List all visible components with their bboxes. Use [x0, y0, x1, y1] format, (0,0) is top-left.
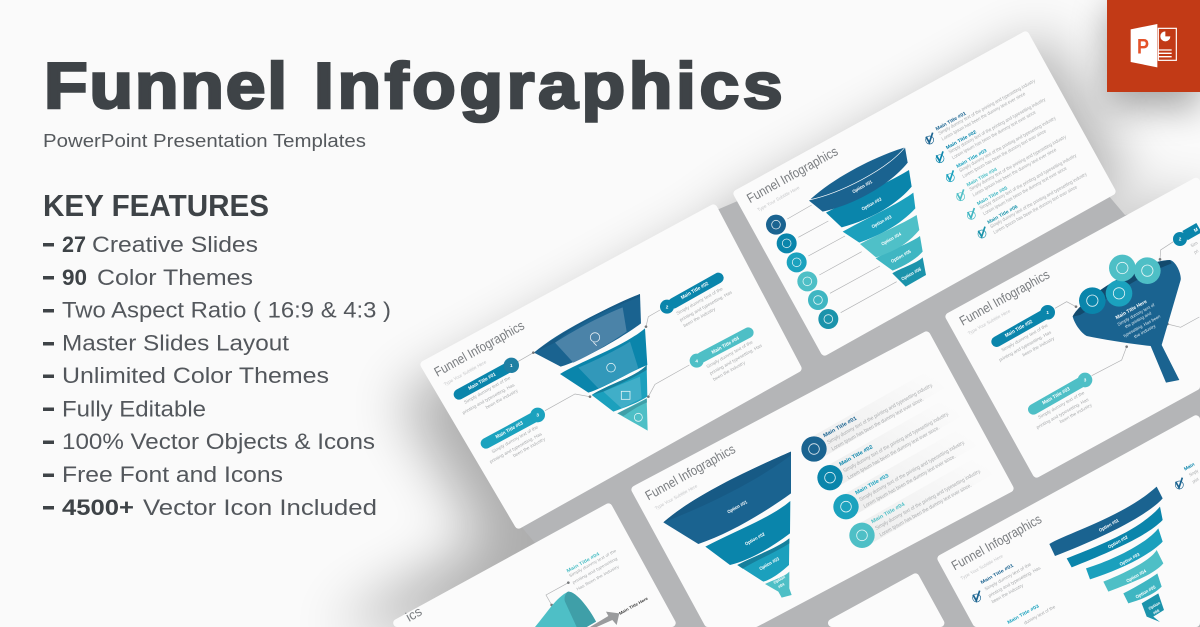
feature list: Creative Slides — [92, 232, 258, 257]
callout: main title 01: Main Title #01 — [467, 372, 497, 392]
four tier funnel — [534, 294, 648, 431]
twisted funnel: Option #04 — [1125, 568, 1147, 584]
list rows: Lorem Ipsum has been the dummy text ever since. — [847, 425, 941, 481]
callout: main title 02: 2 — [666, 304, 669, 309]
callout: main title 03: printing and typesetting. Has — [489, 431, 543, 464]
panel: slide with four tier funnel and icons, left — [424, 208, 798, 525]
checklist: Lorem Ipsum has been the dummy text ever since — [951, 110, 1037, 161]
checklist item 03 — [1006, 603, 1056, 626]
four tier funnel: Option — [772, 574, 787, 585]
checklist item 02 — [1175, 462, 1200, 489]
six tier funnel: Option #03 — [871, 214, 893, 229]
callout: main title 04: been the industry — [712, 360, 747, 382]
list rows — [801, 378, 986, 548]
feature list: Unlimited Color Themes — [62, 363, 329, 388]
callout: main title 01: printing and typesetting. Has — [461, 382, 516, 415]
checklist item 01: printing and typesetting. Has — [987, 565, 1042, 598]
slide title: ics — [403, 604, 425, 625]
checklist item 01: been the industry — [991, 582, 1025, 604]
twisted funnel: Option #03 — [1119, 552, 1141, 567]
slide subtitle: Type Your Subtitle Here — [443, 359, 488, 387]
callout: main title cut off at right edge — [1173, 227, 1199, 255]
list rows: Simply dummy text of the printing and typesetting industry. — [874, 468, 982, 532]
funnel content — [535, 548, 649, 627]
callout: main title 03 — [486, 408, 547, 464]
panel: slide with hopper funnel, right — [949, 182, 1199, 474]
checklist item 03: dummy text of the — [1023, 604, 1056, 626]
callout: main title 01 — [459, 358, 519, 415]
hopper funnel with spheres: Simply dummy text of — [1116, 302, 1156, 327]
four tier funnel — [663, 452, 792, 598]
checklist: Main Title #06 — [986, 204, 1019, 226]
callout: main title 04: Main Title #04 — [711, 336, 741, 356]
checklist: Lorem Ipsum has been the dummy text ever since — [941, 91, 1027, 142]
six tier funnel — [809, 147, 926, 287]
heading: key features: KEY FEATURES — [43, 188, 269, 223]
callout: main title 02: Main Title #02 — [680, 281, 710, 301]
feature list: Two Aspect Ratio ( 16:9 & 4:3 ) — [62, 298, 391, 322]
checklist: Simply dummy text of the printing and typesetting industry — [948, 97, 1047, 155]
title: Funnel — [44, 50, 287, 122]
hopper funnel with spheres: the printing and — [1124, 310, 1153, 329]
panel: slide with twisted funnel, bottom right — [941, 419, 1200, 626]
panel: slide with six tier funnel and checklist, top right — [737, 35, 1112, 352]
slide title: Funnel Infographics — [432, 318, 527, 380]
checklist item 01: Simply dummy text of the — [984, 562, 1032, 592]
twisted funnel: Option #02 — [1107, 534, 1129, 550]
checklist: Main Title #04 — [966, 167, 999, 188]
feature list: 100% Vector Objects & Icons — [62, 429, 375, 454]
hopper funnel with spheres: the industry — [1133, 323, 1157, 339]
icon circles — [766, 215, 838, 329]
callout: main title 04 — [690, 333, 763, 382]
list rows: Lorem Ipsum has been the dummy text ever since. — [831, 397, 925, 452]
feature list: Fully Editable — [62, 396, 206, 422]
callout: main title 02: Simply dummy text of the — [675, 286, 724, 316]
list rows: Lorem Ipsum has been the dummy text ever since. — [863, 454, 957, 510]
six tier funnel: Option #05 — [890, 249, 912, 264]
callout: main title 03 — [1033, 373, 1093, 430]
six tier funnel: Option #01 — [851, 179, 873, 194]
funnel content: Main Title Here — [618, 595, 649, 616]
six tier funnel: Option #06 — [900, 266, 922, 282]
title: Infographics — [314, 50, 783, 122]
callout: main title 01: 1 — [510, 363, 513, 368]
twisted funnel: Option #05 — [1135, 584, 1157, 600]
feature list: 27 — [62, 232, 86, 257]
subtitle: PowerPoint Presentation Templates — [43, 130, 366, 151]
callout: main title 01: been the industry — [485, 388, 519, 410]
callout: main title 03: Main Title #03 — [495, 420, 525, 440]
twisted funnel: #06 — [1152, 608, 1161, 616]
hopper funnel with spheres: Main Title Here — [1115, 299, 1148, 321]
checklist — [926, 78, 1089, 238]
hopper funnel with spheres — [1073, 255, 1181, 383]
funnel content: printing and typesetting — [571, 556, 619, 585]
panel: slide with arrow funnel, bottom left — [397, 507, 672, 627]
connector lines — [517, 310, 689, 411]
callout: main title 03: been the industry — [512, 436, 547, 458]
callout: main title 03: printing and typesetting. Has — [1035, 397, 1090, 430]
list rows: Main Title #01 — [822, 416, 858, 439]
funnel content: Has Been the industry — [575, 563, 621, 592]
checklist: Lorem Ipsum has been the dummy text ever since — [992, 184, 1079, 236]
callout: main title cut off at right edge: 2 — [1179, 237, 1182, 242]
checklist: Simply dummy text of the printing and typesetting industry — [989, 171, 1089, 230]
list rows: Lorem Ipsum has been the dummy text ever since. — [879, 483, 973, 538]
callout: main title 03: 3 — [1084, 378, 1087, 383]
list rows: Main Title #03 — [854, 473, 890, 496]
callout: main title 03: 3 — [536, 413, 539, 418]
six tier funnel: Option #04 — [880, 231, 902, 247]
feature list: Color Themes — [97, 265, 253, 290]
list rows: Simply dummy text of the printing and typesetting industry. — [826, 382, 934, 446]
slide shadows — [329, 36, 1200, 627]
callout: main title cut off at right edge: pri — [1193, 248, 1199, 255]
list rows: Main Title #02 — [838, 444, 874, 468]
checklist: Main Title #03 — [955, 148, 988, 170]
feature list: 90 — [62, 265, 87, 290]
title — [44, 50, 783, 122]
feature list: Vector Icon Included — [143, 495, 377, 520]
checklist: Lorem Ipsum has been the dummy text ever since — [982, 166, 1068, 217]
checklist: Main Title #05 — [976, 185, 1009, 207]
callout: main title 02 — [997, 305, 1056, 363]
callout: main title 04: printing and typesetting. Has — [709, 343, 763, 376]
callout: main title 02: 1 — [1046, 310, 1049, 315]
callout: main title 01: Simply dummy text of the — [463, 375, 512, 405]
panel: blank slide bottom centre — [832, 577, 940, 623]
twisted funnel: Option — [1147, 600, 1162, 611]
slide subtitle: Type Your Subtitle Here — [756, 185, 801, 213]
checklist item 02: Main — [1183, 462, 1196, 472]
slide title: Funnel Infographics — [643, 441, 738, 503]
arrows from funnel to icons — [787, 205, 897, 313]
feature list: Master Slides Layout — [62, 330, 290, 356]
powerpoint badge: P — [1137, 34, 1149, 58]
hopper funnel with spheres: typesetting. Has been — [1122, 313, 1162, 338]
callout: main title 04: 4 — [695, 358, 698, 363]
callout: main title 02: been the industry — [1021, 335, 1056, 358]
callout: main title 02: Simply dummy text of the — [1000, 323, 1049, 353]
list rows: Main Title #04 — [870, 502, 906, 525]
checklist: Simply dummy text of the printing and typesetting industry — [968, 134, 1068, 193]
callout: main title 02: printing and typesetting. Has — [679, 289, 733, 323]
callout: main title 03: Simply dummy text of the — [1037, 390, 1086, 420]
four tier funnel: Option #02 — [744, 531, 766, 547]
callout: main title 04: Simply dummy text of the — [705, 339, 754, 369]
checklist item 01 — [973, 562, 1042, 604]
funnel content: Simply dummy text of the — [568, 548, 618, 578]
panel: slide with funnel and list rows, centre — [635, 335, 1010, 623]
callout: main title 03: Main Title #03 — [1041, 386, 1071, 406]
slide subtitle: Type Your Subtitle Here — [967, 308, 1012, 336]
twisted funnel — [1049, 487, 1164, 622]
feature list: 4500+ — [62, 495, 134, 520]
feature list — [43, 232, 391, 520]
callout: main title 03: been the industry — [1059, 402, 1093, 424]
four tier funnel: Option #01 — [726, 499, 748, 515]
twisted funnel: Option #01 — [1098, 518, 1120, 533]
checklist item 01: Main Title #01 — [980, 562, 1015, 585]
powerpoint badge — [1107, 0, 1200, 108]
connector lines — [1055, 242, 1199, 376]
callout: main title 03: Simply dummy text of the — [491, 424, 539, 454]
checklist: Simply dummy text of the printing and typesetting industry — [979, 153, 1078, 211]
four tier funnel: Option #03 — [758, 556, 780, 571]
slide title: Funnel Infographics — [744, 143, 841, 206]
checklist: Main Title #01 — [935, 111, 968, 132]
callout: main title cut off at right edge: Sim — [1190, 240, 1199, 248]
checklist: Lorem Ipsum has been the dummy text ever since — [972, 147, 1058, 198]
slide subtitle: Type Your Subtitle Here — [960, 553, 1004, 581]
slide title: Funnel Infographics — [957, 267, 1052, 329]
checklist: Main Title #02 — [945, 129, 978, 151]
checklist: Lorem Ipsum has been the dummy text ever since — [961, 128, 1048, 180]
list rows: Simply dummy text of the printing and typesetting industry. — [858, 440, 966, 503]
callout: main title cut off at right edge: M — [1193, 227, 1199, 234]
slide subtitle: Type Your Subtitle Here — [654, 483, 699, 511]
gaps between slides — [420, 45, 1200, 627]
checklist item 03: Main Title #03 — [1006, 603, 1040, 625]
six tier funnel: Option #02 — [861, 196, 883, 212]
slide title: Funnel Infographics — [949, 511, 1044, 573]
callout: main title 02 — [660, 278, 733, 328]
callout: main title 02: Main Title #02 — [1004, 319, 1034, 339]
feature list: Free Font and Icons — [62, 462, 283, 487]
callout: main title 02: been the industry — [682, 306, 717, 328]
checklist: Simply dummy text of the printing and typesetting industry — [937, 78, 1037, 137]
callout: main title 02: printing and typesetting. Has — [998, 329, 1053, 363]
four tier funnel: #04 — [777, 581, 786, 589]
list rows: Simply dummy text of the printing and typesetting industry. — [842, 411, 950, 474]
checklist: Simply dummy text of the printing and typesetting industry — [958, 115, 1058, 174]
funnel content: Main Title #04 — [566, 551, 601, 574]
